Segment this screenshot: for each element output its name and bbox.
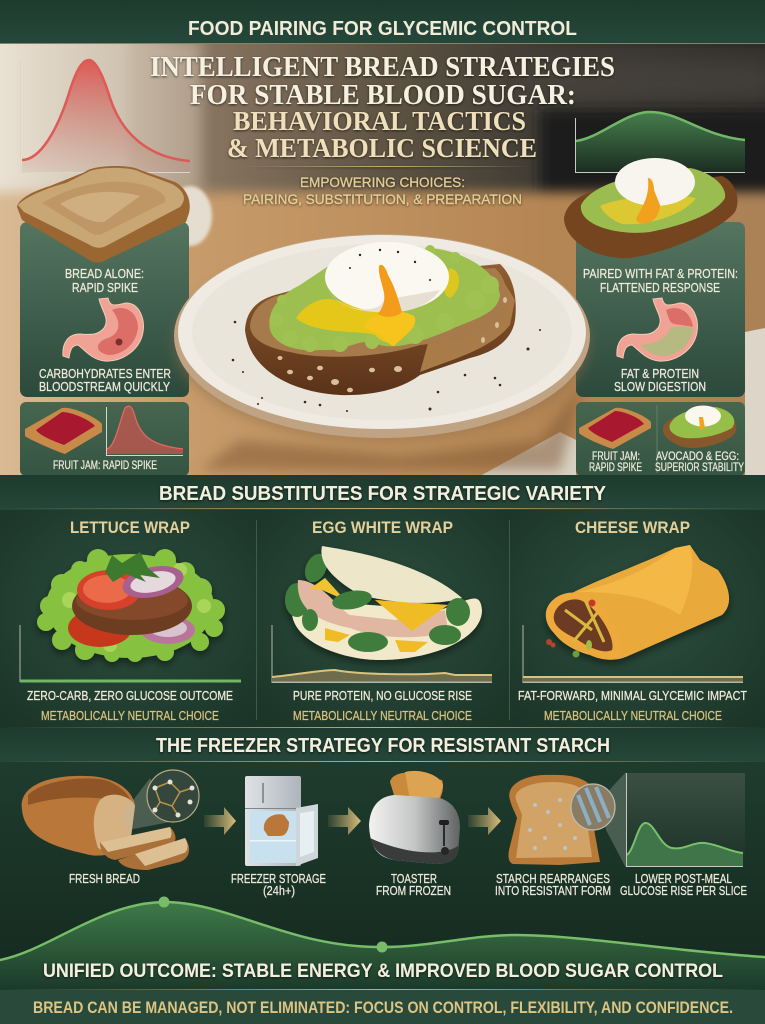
panel: bread alone: BREAD ALONE: bbox=[65, 267, 144, 281]
heading: freezer strategy: THE FREEZER STRATEGY FOR RESISTANT STARCH bbox=[156, 735, 610, 757]
illustration: egg white wrap bbox=[285, 546, 482, 660]
poached egg bbox=[325, 242, 449, 346]
card: cheese wrap bbox=[518, 519, 747, 723]
step: freezer storage: (24h+) bbox=[263, 884, 295, 898]
step: toaster: TOASTER bbox=[391, 872, 437, 886]
footer band: closing message bbox=[0, 989, 765, 1024]
chart: lowered curve bbox=[626, 773, 745, 867]
panel: freezer strategy bbox=[0, 727, 765, 990]
panel: bread alone: RAPID SPIKE bbox=[72, 281, 138, 295]
illustration: toaster with toast bbox=[369, 771, 460, 864]
step: lower glucose rise: LOWER POST-MEAL bbox=[635, 872, 732, 886]
chart: nearly flat gold line bbox=[272, 625, 492, 683]
card: egg white wrap: EGG WHITE WRAP bbox=[312, 519, 453, 537]
title bbox=[150, 51, 615, 163]
subtitle bbox=[240, 166, 530, 207]
card: cheese wrap: CHEESE WRAP bbox=[575, 519, 690, 537]
toast bbox=[245, 264, 516, 395]
panel: paired with fat and protein: FAT & PROTEIN bbox=[621, 367, 699, 381]
step: freezer storage: FREEZER STORAGE bbox=[231, 872, 326, 886]
pepper specks bbox=[232, 321, 541, 412]
step: lower glucose rise bbox=[620, 773, 747, 898]
arrow: to toaster bbox=[328, 807, 361, 835]
panel: jam versus avocado comparison bbox=[576, 402, 745, 476]
icon: jam toast bbox=[25, 408, 102, 454]
heading: unified outcome: UNIFIED OUTCOME: STABLE ENERGY & IMPROVED BLOOD SUGAR CONTROL bbox=[43, 960, 723, 982]
icon: avocado egg toast small bbox=[663, 406, 736, 448]
illustration: lettuce burger bbox=[37, 549, 225, 662]
title: BEHAVIORAL TACTICS bbox=[233, 106, 526, 136]
panel: bread substitutes bbox=[0, 475, 765, 728]
illustration: cheese wrap bbox=[546, 545, 729, 660]
icon: stomach with slow digestion bbox=[617, 298, 697, 361]
card: lettuce wrap bbox=[20, 519, 241, 723]
title: INTELLIGENT BREAD STRATEGIES bbox=[150, 51, 615, 83]
illustration: toast with starch crystals bbox=[508, 775, 600, 865]
panel: fruit jam rapid spike bbox=[20, 402, 189, 476]
step: starch rearranges: INTO RESISTANT FORM bbox=[495, 884, 611, 898]
panel: paired with fat and protein: PAIRED WITH FAT & PROTEIN: bbox=[583, 267, 738, 281]
card: egg white wrap: METABOLICALLY NEUTRAL CHOICE bbox=[293, 709, 472, 723]
chart: unified glucose curve bbox=[0, 896, 765, 990]
illustration: open freezer bbox=[245, 776, 318, 866]
icon: avocado egg toast bbox=[564, 158, 737, 258]
subtitle: EMPOWERING CHOICES: bbox=[300, 174, 465, 190]
illustration: bread loaf and slices bbox=[22, 776, 189, 870]
panel: bread alone: BLOODSTREAM QUICKLY bbox=[39, 380, 171, 394]
title: & METABOLIC SCIENCE bbox=[227, 133, 537, 163]
card: egg white wrap bbox=[272, 519, 492, 723]
step: starch rearranges bbox=[495, 772, 626, 898]
chart: small spike bbox=[106, 406, 183, 456]
chart: flattened glucose response bbox=[576, 112, 745, 172]
arrow: to freezer bbox=[204, 807, 236, 835]
plate with avocado toast and poached egg bbox=[174, 234, 590, 441]
panel: paired with fat and protein: FLATTENED RESPONSE bbox=[600, 281, 720, 295]
arrow: to starch rearrangement bbox=[468, 807, 501, 835]
title: FOR STABLE BLOOD SUGAR: bbox=[190, 79, 576, 111]
chart: rapid glucose spike bbox=[20, 60, 190, 172]
step: starch rearranges: STARCH REARRANGES bbox=[496, 872, 610, 886]
header band: food pairing: FOOD PAIRING FOR GLYCEMIC CONTROL bbox=[188, 18, 577, 40]
heading: bread substitutes: BREAD SUBSTITUTES FOR STRATEGIC VARIETY bbox=[159, 483, 607, 505]
card: cheese wrap: METABOLICALLY NEUTRAL CHOICE bbox=[544, 709, 722, 723]
avocado bbox=[269, 245, 500, 352]
step: toaster: FROM FROZEN bbox=[376, 884, 451, 898]
panel: paired with fat and protein bbox=[564, 158, 745, 397]
chart: flat green line bbox=[20, 625, 241, 682]
card: lettuce wrap: ZERO-CARB, ZERO GLUCOSE OUTCOME bbox=[27, 689, 233, 703]
panel: fruit jam rapid spike: FRUIT JAM: RAPID SPIKE bbox=[53, 460, 157, 472]
chart: flat gold line bbox=[522, 625, 743, 683]
panel: jam versus avocado comparison: FRUIT JAM: bbox=[592, 451, 640, 463]
step: fresh bread: FRESH BREAD bbox=[69, 872, 140, 886]
icon: jam toast small bbox=[579, 408, 651, 449]
icon: stomach with fast emptying bbox=[63, 298, 143, 361]
step: freezer storage bbox=[231, 776, 326, 898]
step: fresh bread bbox=[22, 770, 199, 886]
card: egg white wrap: PURE PROTEIN, NO GLUCOSE RISE bbox=[293, 689, 472, 703]
panel: jam versus avocado comparison: RAPID SPIKE bbox=[589, 462, 642, 474]
card: lettuce wrap: LETTUCE WRAP bbox=[70, 519, 190, 537]
panel: bread alone: CARBOHYDRATES ENTER bbox=[39, 367, 171, 381]
panel: bread alone bbox=[17, 166, 190, 397]
card: lettuce wrap: METABOLICALLY NEUTRAL CHOICE bbox=[41, 709, 219, 723]
subtitle: PAIRING, SUBSTITUTION, & PREPARATION bbox=[243, 191, 522, 207]
icon: crystal magnifier bbox=[571, 772, 626, 868]
panel: hero photo background bbox=[0, 43, 765, 502]
step: toaster bbox=[369, 771, 460, 898]
icon: toast slice bbox=[17, 166, 190, 262]
header band: food pairing bbox=[0, 0, 765, 44]
icon: molecule magnifier bbox=[122, 770, 199, 830]
panel: jam versus avocado comparison: AVOCADO & EGG: bbox=[656, 451, 739, 463]
panel: paired with fat and protein: SLOW DIGESTION bbox=[614, 380, 706, 394]
